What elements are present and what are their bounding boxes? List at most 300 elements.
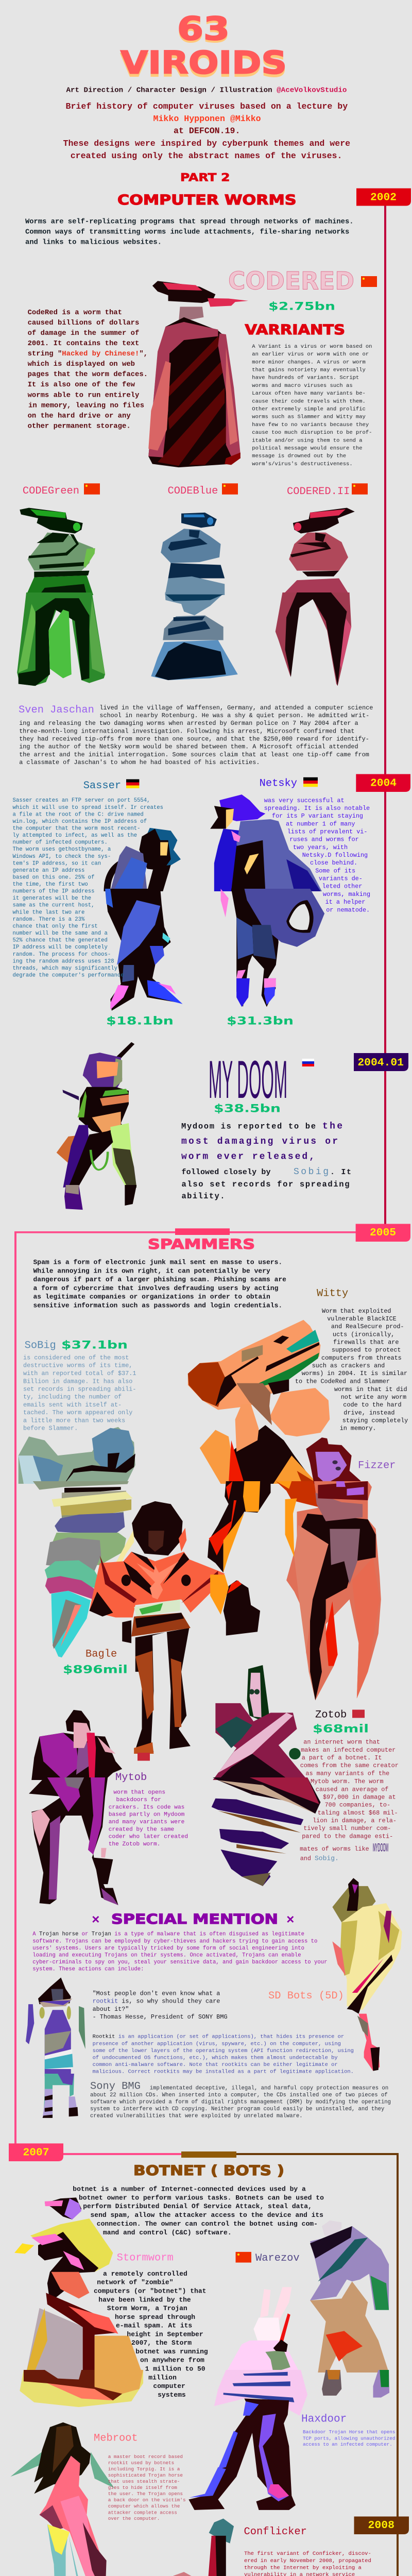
character: Rootkit figure xyxy=(26,1977,85,2118)
character: Bagle woman xyxy=(89,1501,260,1754)
Witty text: to the CodeRed and Slammer xyxy=(295,1378,390,1385)
year tag 2008: 2008 xyxy=(368,2520,394,2532)
Mebroot text: a master boot record based xyxy=(108,2454,183,2460)
variants description xyxy=(252,344,372,467)
Zotob text: 700 companies, to- xyxy=(325,1802,390,1809)
Mydoom description: worm ever released, xyxy=(181,1152,315,1162)
Zotob text: and xyxy=(300,1855,311,1862)
Witty text: such as crackers and xyxy=(312,1362,385,1369)
botnet description xyxy=(73,2185,324,2236)
Stormworm text: a remotely controlled xyxy=(103,2270,187,2278)
Witty text: vulnerable BlackICE xyxy=(327,1315,397,1323)
SoBig text: set records in spreading abili- xyxy=(23,1386,136,1393)
Netsky description: was very successful at xyxy=(264,797,345,804)
variants description: an earlier virus or worm with one or xyxy=(252,351,369,358)
Netsky description: for its P variant staying xyxy=(272,812,363,820)
year tag 2002 xyxy=(356,189,411,206)
variants description: Laroux often have many variants be- xyxy=(252,391,366,397)
Sasser description: number will be the same and a xyxy=(12,930,108,937)
Mydoom description: . It xyxy=(330,1168,351,1177)
CodeRed description: CodeRed is a worm that xyxy=(28,309,122,317)
CodeRed description: It is also one of the few xyxy=(28,381,135,389)
character: CodeGreen xyxy=(17,508,105,686)
Mydoom description: ability. xyxy=(181,1192,225,1201)
Mytob text: the Zotob worm. xyxy=(109,1841,160,1848)
spam description: as legitimate companies or organizations in order to obtain xyxy=(33,1293,270,1301)
label: Bagle with cost: $896mil xyxy=(63,1663,128,1675)
Stormworm text: network of "zombie" xyxy=(97,2279,174,2286)
Netsky description: spreading. It is also notable xyxy=(264,805,370,812)
spam description xyxy=(33,1258,286,1310)
Witty text: drive, instead xyxy=(344,1409,394,1416)
character: CodeRed.II xyxy=(276,508,355,686)
Mebroot text: a back door on the victim's xyxy=(108,2497,186,2503)
Conflicker text: Conflicker xyxy=(244,2526,307,2538)
Sasser description: generate an IP address xyxy=(12,868,84,874)
variants description: A Variant is a virus or worm based on xyxy=(252,344,372,350)
Sony BMG description: system to interfere with CD copying. Neither program could easily be uninstalled, and they xyxy=(90,2106,384,2112)
Netsky description: lists of prevalent vi- xyxy=(287,828,367,836)
intro text: created using only the abstract names of the viruses. xyxy=(71,151,342,161)
rootkit description: of undocumented OS functions, etc.), which makes them almost undetectable by xyxy=(93,2055,338,2061)
CodeRed description: 2001. It contains the text xyxy=(28,340,139,348)
intro text xyxy=(63,101,350,161)
Mebroot text xyxy=(94,2433,186,2521)
Mytob text: Mytob xyxy=(115,1772,147,1784)
Sasser description: based on this one. 25% of xyxy=(12,875,94,881)
quote and rootkit text: "Most people don't even know what a xyxy=(93,1990,220,1997)
Zotob text: pared to the damage esti- xyxy=(302,1833,393,1840)
Sasser description: Sasser creates an FTP server on port 5554, xyxy=(12,798,150,804)
Mydoom description: most damaging virus or xyxy=(181,1137,338,1147)
Haxdoor text: Backdoor Trojan Horse that opens xyxy=(303,2429,395,2435)
Sasser description: it generates will be the xyxy=(12,895,91,902)
name: My Doom with flag and cost xyxy=(209,1050,314,1115)
Stormworm text: computers (or "botnet") that xyxy=(94,2287,206,2295)
names: Sasser and Netsky with flags: Sasser xyxy=(83,780,121,792)
worms description: and links to malicious websites. xyxy=(25,238,162,246)
Mebroot text: sophisticated Trojan horse xyxy=(108,2472,183,2478)
worms description: Worms are self-replicating programs that spread through networks of machines. xyxy=(25,217,354,226)
variants description: Other extremely simple and prolific xyxy=(252,406,366,412)
character: Mydoom xyxy=(57,1042,136,1210)
variants description: worms such as Slammer and Witty may xyxy=(252,414,366,420)
Conflicker text: The first variant of Conficker, discov- xyxy=(244,2551,371,2557)
names: Sasser and Netsky with flags: Netsky xyxy=(260,778,297,789)
Zotob text xyxy=(300,1709,399,1862)
Sony BMG description: created vulnerabilities that were exploited by unrelated malware. xyxy=(90,2113,303,2120)
costs: Sasser and Netsky: $18.1bn xyxy=(106,1014,174,1027)
character: SD Bots xyxy=(332,1878,402,2071)
name: My Doom with flag and cost: $38.5bn xyxy=(214,1103,281,1115)
Zotob text: lion in damage, a rela- xyxy=(313,1817,397,1824)
character: Bagle creature xyxy=(19,1427,135,1657)
Stormworm text: height in September xyxy=(127,2330,203,2338)
Stormworm text: e-mail spam. At its xyxy=(116,2322,192,2330)
Mebroot text: computer which allows the xyxy=(108,2503,180,2509)
character: Zotob xyxy=(212,1665,320,1886)
Sasser description: same as the current host, xyxy=(12,903,94,909)
Mytob text: and many variants were xyxy=(109,1819,184,1825)
CodeRed description: pages that the worm defaces. xyxy=(28,370,148,379)
costs: Sasser and Netsky: $31.3bn xyxy=(227,1014,294,1027)
Witty text: code to the hard xyxy=(343,1401,402,1409)
Stormworm text: 1 million to 50 xyxy=(145,2365,205,2373)
variants description: that gains notoriety may eventually xyxy=(252,367,366,373)
bio: Sven Jaschan: Sven Jaschan xyxy=(19,704,94,716)
Mydoom description: also set records for spreading xyxy=(181,1180,349,1189)
SoBig text: destructive worms of its time, xyxy=(23,1362,132,1369)
Zotob text: caused an average of xyxy=(316,1786,388,1793)
bio: Sven Jaschan: school in nearby Rotenburg. He was a shy & quiet person. He admitted writ- xyxy=(99,712,369,719)
Netsky description: it a helper xyxy=(325,899,365,906)
SoBig text: with an reported total of $37.1 xyxy=(23,1370,136,1377)
Mytob text: based partly on Mydoom xyxy=(109,1812,185,1818)
variant names with flags: CODERED.II xyxy=(287,486,350,498)
Sasser description: random. There is a 23% xyxy=(12,917,85,923)
intro text: Brief history of computer viruses based on a lecture by xyxy=(66,101,348,111)
rootkit description: common anti-malware software. Note that rootkits can be either legitimate or xyxy=(93,2062,338,2068)
credits: Art Direction / Character Design / Illustration @AceVolkovStudio xyxy=(66,86,347,94)
Sasser description xyxy=(12,798,163,979)
Witty text xyxy=(295,1287,408,1432)
worms description: Common ways of transmitting worms include attachments, file-sharing networks xyxy=(25,228,349,236)
Stormworm text: Storm Worm, a Trojan xyxy=(107,2304,187,2312)
botnet description: connection. The owner can control the botnet using com- xyxy=(97,2220,318,2228)
character: Witty xyxy=(188,1320,330,1615)
bio: Sven Jaschan: a classmate of Jaschan's to whom he had boasted of his activities. xyxy=(19,759,260,766)
trojan description: software. Trojans can be employed by cyber-thieves and hackers trying to gain access to xyxy=(32,1938,317,1944)
trojan description: users' systems. Users are typically tricked by some form of social engineering into xyxy=(32,1945,304,1952)
costs: Sasser and Netsky xyxy=(106,1014,294,1027)
year tag 2008 xyxy=(354,2516,409,2534)
Sasser description: The worm uses gethostbyname, a xyxy=(12,846,111,853)
SoBig text: emails sent with itself at- xyxy=(23,1401,122,1409)
bio: Sven Jaschan: three-month-long international investigation. Following his arrest, Microsoft confirmed that xyxy=(19,727,354,735)
spam description: Spam is a form of electronic junk mail sent en masse to users. xyxy=(33,1258,282,1266)
Netsky description: at number 1 of many xyxy=(286,820,355,827)
Zotob text: taling almost $68 mil- xyxy=(318,1809,398,1817)
botnet description: mand and control (C&C) software. xyxy=(103,2229,232,2236)
Stormworm text: have been linked by the xyxy=(98,2296,191,2303)
CodeRed description: which is displayed on web xyxy=(28,360,135,368)
SoBig text: Billion in damage. It has also xyxy=(23,1378,132,1385)
Sasser description: ly attempted to infect, as well as the xyxy=(12,833,137,839)
botnet description: botnet is a number of Internet-connected devices used by a xyxy=(73,2185,306,2193)
Netsky description: variants de- xyxy=(319,875,363,882)
Mytob text: worm that opens xyxy=(113,1789,165,1795)
year tag 2005: 2005 xyxy=(370,1227,396,1239)
year tag 2002: 2002 xyxy=(370,192,397,204)
Netsky description: close behind. xyxy=(310,859,357,867)
Zotob text: $97,000 in damage at xyxy=(323,1793,396,1801)
spam description: While annoying in its own right, it can potentially be very xyxy=(33,1267,270,1275)
year tag 2004: 2004 xyxy=(370,778,397,789)
Netsky description: Some of its xyxy=(315,867,355,874)
Witty text: computers from threats xyxy=(321,1354,402,1362)
Witty text: firewalls that are xyxy=(333,1338,399,1346)
character: Mebroot xyxy=(10,2422,129,2576)
heading: spammers: SPAMMERS xyxy=(148,1236,255,1252)
bio: Sven Jaschan: the arrest and the initial interrogation. Some sources claim that at least one tip-off came from xyxy=(19,751,369,758)
Witty text: and RealSecure prod- xyxy=(331,1323,404,1330)
Haxdoor text: access to an infected computer. xyxy=(303,2442,392,2447)
variants description: have few to no variants because they xyxy=(252,422,369,428)
Sasser description: ing the random address uses 128 xyxy=(12,958,114,964)
trojan description: loading and executing Trojans on their systems. Once activated, Trojans can enable xyxy=(32,1952,301,1958)
label: Bagle with cost xyxy=(63,1648,150,1761)
CodeRed description: other permanent storage. xyxy=(28,422,131,430)
SoBig text: is considered one of the most xyxy=(23,1354,129,1361)
character: Stormworm xyxy=(14,2197,143,2407)
variants description: more minor changes. A virus or worm xyxy=(252,359,366,365)
Sasser description: random. The process for choos- xyxy=(12,952,111,958)
quote and rootkit text: about it?" xyxy=(93,2006,129,2013)
SoBig text: SoBig xyxy=(25,1340,56,1351)
year tag 2007: 2007 xyxy=(23,2147,49,2159)
variants description: cause their code travels with them. xyxy=(252,398,366,404)
label: Fizzer: Fizzer xyxy=(358,1460,396,1471)
CodeRed description: caused billions of dollars xyxy=(28,319,139,327)
variants description: political message would ensure the xyxy=(252,445,363,451)
Netsky description: worms, making xyxy=(323,891,370,898)
Mebroot text: gies to hide itself from xyxy=(108,2485,177,2490)
Stormworm text: horse spread through xyxy=(115,2313,195,2321)
Zotob text: a part of a botnet. It xyxy=(302,1754,382,1761)
label: Warezov with flag: Warezov xyxy=(255,2252,300,2264)
character: Fizzer xyxy=(285,1437,381,1700)
spam description: dangerous if part of a larger phishing scam. Phishing scams are xyxy=(33,1276,286,1283)
SoBig text: a little more than two weeks xyxy=(23,1417,125,1424)
Stormworm text: million xyxy=(148,2374,177,2381)
botnet description: botnet owner to perform various tasks. Botnets can be used to xyxy=(79,2194,324,2202)
Sony BMG description: about 22 million CDs. When inserted into a computer, the CDs installed one of two pieces of xyxy=(90,2092,388,2098)
Zotob text: as many variants of the xyxy=(305,1770,389,1777)
Sony BMG description: implementated deceptive, illegal, and harmful copy protection measures on xyxy=(150,2085,388,2091)
Sasser description: degrade the computer's performance xyxy=(12,973,124,979)
character: Warezov xyxy=(310,2221,389,2398)
trojan description xyxy=(32,1931,327,1973)
Netsky description: Netsky.D following xyxy=(302,852,368,859)
Zotob text: comes from the same creator xyxy=(300,1762,399,1769)
Stormworm text: 2007, the Storm xyxy=(131,2339,192,2347)
Stormworm text: systems xyxy=(158,2391,186,2399)
Netsky description: or nematode. xyxy=(326,906,370,913)
title xyxy=(121,10,287,84)
Witty text: in memory. xyxy=(340,1425,376,1432)
part heading: PART 2 xyxy=(180,171,230,183)
variants description: message is drowned out by the xyxy=(252,453,346,460)
CodeRed description: of damage in the summer of xyxy=(28,329,139,337)
CodeRed description: on the hard drive or any xyxy=(28,412,131,420)
bio: Sven Jaschan: lived in the village of Waffensen, Germany, and attended a computer science xyxy=(99,704,373,711)
variant names with flags: CODEBlue xyxy=(168,485,218,497)
Sasser description: number of infected computers. xyxy=(12,840,108,846)
CodeRed description xyxy=(28,309,148,430)
variants description: itable and/or using them to send a xyxy=(252,437,363,444)
heading: botnet: BOTNET ( BOTS ) xyxy=(133,2163,284,2179)
rootkit description xyxy=(93,2034,354,2075)
Netsky description: leted other xyxy=(322,883,362,890)
title: 63 xyxy=(177,10,230,47)
Mytob text: coder who later created xyxy=(109,1834,188,1840)
title: VIROIDS xyxy=(121,44,287,81)
Conflicker text xyxy=(244,2526,374,2576)
Mydoom description xyxy=(181,1121,351,1201)
Mebroot text: Mebroot xyxy=(94,2433,138,2445)
title: 63 xyxy=(177,12,230,49)
Stormworm text: computer xyxy=(153,2382,185,2390)
variants description: have hundreds of variants. Script xyxy=(252,375,359,381)
rootkit description: presence of another application (virus, spyware, etc.) on the computer, using xyxy=(93,2041,341,2047)
botnet description: perform Distributed Denial Of Service Attack, steal data, xyxy=(83,2202,312,2210)
Mydoom description: followed closely by xyxy=(181,1168,271,1177)
character: Mytob xyxy=(29,1710,122,1905)
Witty text: worms) in 2004. It is similar xyxy=(302,1370,407,1377)
spam description: sensitive information such as passwords and login credentials. xyxy=(33,1301,282,1310)
Sasser description: which it will use to spread itself. Ir creates xyxy=(12,805,163,811)
variants description: cause too much disruption to be prof- xyxy=(252,430,372,436)
variants description: worms and macro viruses such as xyxy=(252,383,353,389)
Stormworm text: botnet was running xyxy=(135,2348,208,2355)
Sony BMG description: software which provided a form of digital rights management (DRM) by modifying the operating xyxy=(90,2099,391,2106)
heading: special mention: × xyxy=(286,1912,295,1928)
bio: Sven Jaschan xyxy=(19,704,373,766)
quote and rootkit text: rootkit is, so why should they care xyxy=(93,1998,220,2005)
spam description: a form of cybercrime that involves defrauding users by acting xyxy=(33,1284,279,1292)
Mebroot text: including Torpig. It is a xyxy=(108,2466,180,2472)
Witty text: supposed to protect xyxy=(332,1347,401,1354)
rootkit description: some of the lower layers of the operating system (API function redirection, using xyxy=(93,2048,354,2054)
Witty text: worms in that it did xyxy=(334,1386,407,1393)
label: Bagle with cost: Bagle xyxy=(85,1648,117,1660)
Haxdoor text: TCP ports, allowing unauthorized xyxy=(303,2435,395,2441)
intro text: Mikko Hypponen @Mikko xyxy=(153,114,261,124)
Haxdoor text: Haxdoor xyxy=(301,2414,347,2426)
Mydoom description: Mydoom is reported to be xyxy=(181,1122,316,1131)
name: CodeRed with flag and cost: $2.75bn xyxy=(268,300,335,313)
CodeRed description: in memory, leaving no files xyxy=(28,401,144,410)
quote and rootkit text: SD Bots (5D) xyxy=(268,1990,344,2002)
name: CodeRed with flag and cost: CODERED xyxy=(228,267,354,296)
label: Warezov with flag xyxy=(236,2252,300,2264)
Mebroot text: attacker complete access xyxy=(108,2510,177,2515)
heading: special mention: × xyxy=(92,1912,100,1928)
Witty text: Witty xyxy=(317,1287,348,1299)
Mytob text: crackers. Its code was xyxy=(109,1804,184,1810)
Sasser description: while the last two are xyxy=(12,909,84,916)
Mytob text: backdoors for xyxy=(116,1797,161,1803)
Sasser description: the time, the first two xyxy=(12,882,88,888)
Sony BMG description: Sony BMG xyxy=(90,2081,141,2093)
title: VIROIDS xyxy=(121,47,287,84)
Sasser description: a file at the root of the C: drive named xyxy=(12,811,144,818)
Mytob text: created by the same xyxy=(109,1827,174,1833)
variant names with flags: CODEGreen xyxy=(23,485,79,497)
Sasser description: 52% chance that the generated xyxy=(12,938,108,944)
SoBig text: tached. The worm appeared only xyxy=(23,1409,132,1416)
Stormworm text xyxy=(94,2252,208,2399)
Stormworm text: Stormworm xyxy=(117,2252,174,2264)
Sony BMG description xyxy=(90,2081,391,2120)
Conflicker text: through the Internet by exploiting a xyxy=(244,2565,362,2571)
Witty text: ucts (ironically, xyxy=(333,1331,394,1338)
Mebroot text: over the computer. xyxy=(108,2516,160,2521)
character: CodeRed xyxy=(148,281,248,467)
Haxdoor text xyxy=(301,2414,395,2447)
CodeRed description: string "Hacked by Chinese!", xyxy=(28,350,148,358)
Mydoom description: Sobig xyxy=(294,1167,329,1177)
Netsky description: two years, with xyxy=(293,844,348,851)
Sasser description: numbers of the IP address xyxy=(12,889,94,895)
Sasser description: IP address will be completely xyxy=(12,944,108,951)
part heading: COMPUTER WORMS xyxy=(117,192,297,208)
bio: Sven Jaschan: ing and releasing the two damaging worms when arrested by German police on 7 May 2004 after a xyxy=(19,720,358,727)
year tag 2004.01: 2004.01 xyxy=(357,1057,404,1069)
year tag 2005 xyxy=(356,1224,410,1242)
botnet description: send spam, allow the attacker access to the device and its xyxy=(91,2211,323,2219)
intro text: at DEFCON.19. xyxy=(174,126,240,136)
trojan description: cyber-criminals to spy on you, steal your sensitive data, and gain backdoor access to your xyxy=(32,1959,327,1965)
Mebroot text: the user. The Trojan opens xyxy=(108,2491,183,2497)
Zotob text: Zotob xyxy=(315,1709,347,1721)
name: CodeRed with flag and cost xyxy=(228,267,377,313)
Sasser description: threads, which may significantly xyxy=(12,965,117,972)
bio: Sven Jaschan: they had received tip-offs from more than one source, and that the $250,000 reward for identify- xyxy=(19,736,369,743)
Conflicker text: ered in early November 2008, propagated xyxy=(244,2558,371,2564)
year tag 2004.01 xyxy=(354,1053,408,1071)
Witty text: not write any worm xyxy=(341,1394,406,1401)
part heading xyxy=(117,171,297,208)
quote and rootkit text xyxy=(93,1990,344,2021)
heading: special mention: SPECIAL MENTION xyxy=(111,1911,278,1927)
Mydoom description: the xyxy=(322,1121,342,1131)
trojan description: A Trojan horse or Trojan is a type of malware that is often disguised as legitimate xyxy=(32,1931,304,1938)
Zotob text: $68mil xyxy=(313,1723,369,1735)
quote and rootkit text: - Thomas Hesse, President of SONY BMG xyxy=(93,2013,228,2021)
Netsky description: ruses and worms for xyxy=(289,836,359,843)
character: CodeBlue xyxy=(151,513,238,680)
heading: special mention xyxy=(92,1911,295,1928)
CodeRed description: worms able to run entirely xyxy=(28,391,140,399)
character: Netsky xyxy=(210,794,324,1007)
character: Conflicker xyxy=(161,2519,234,2576)
Zotob text: Mytob worm. The worm xyxy=(311,1778,384,1785)
Stormworm text: on anywhere from xyxy=(140,2357,204,2364)
Sasser description: tem's IP address, so it can xyxy=(12,860,101,867)
SoBig text: $37.1bn xyxy=(61,1338,128,1351)
character: Sasser xyxy=(104,828,183,1011)
Zotob text: tively small number com- xyxy=(303,1825,391,1832)
Witty text: staying completely xyxy=(342,1417,408,1424)
variants description: worm's/virus's destructiveness. xyxy=(252,461,353,467)
SoBig text: ty, including the number of xyxy=(23,1394,122,1401)
trojan description: system. These actions can include: xyxy=(32,1967,144,1973)
variant names with flags xyxy=(23,483,368,498)
heading: variants: VARRIANTS xyxy=(245,322,345,338)
Mebroot text: that uses stealth strate- xyxy=(108,2479,180,2484)
names: Sasser and Netsky with flags xyxy=(83,777,318,792)
SoBig text xyxy=(23,1338,136,1432)
Mytob text xyxy=(109,1772,188,1848)
year tag 2004 xyxy=(356,774,410,792)
rootkit description: malicious. Correct rootkits may be installed as a part of legitimate application. xyxy=(93,2069,354,2075)
intro text: These designs were inspired by cyberpunk themes and were xyxy=(63,139,350,148)
rootkit description: Rootkit is an application (or set of applications), that hides its presence or xyxy=(93,2034,344,2040)
Sasser description: win.log, which contains the IP address of xyxy=(12,819,147,825)
Zotob text: Sobig. xyxy=(315,1855,339,1862)
year tag 2007 xyxy=(9,2143,63,2161)
